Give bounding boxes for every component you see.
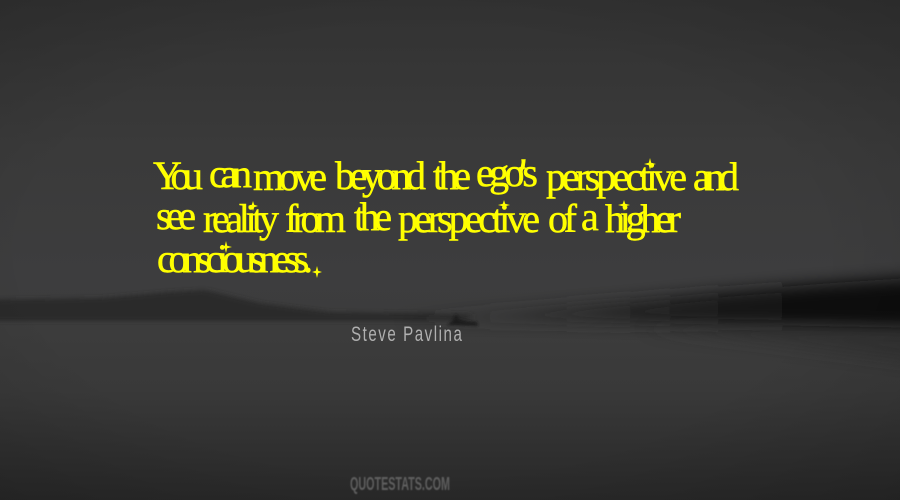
quote text: consciousness. <box>157 236 313 281</box>
distant shoreline left <box>0 290 470 321</box>
quote text: can <box>209 151 252 196</box>
quote text: reality <box>203 196 279 241</box>
quote text: ego's <box>476 150 538 195</box>
water shade right <box>640 328 900 365</box>
quote text: and <box>693 154 739 199</box>
source watermark: QUOTESTATS.COM <box>350 474 450 494</box>
small boat on the horizon <box>447 314 478 326</box>
quote text: the <box>433 153 471 198</box>
author name: Steve Pavlina <box>351 321 463 346</box>
quote text <box>153 150 739 281</box>
quote text: higher <box>605 196 681 241</box>
quote text: beyond <box>335 153 426 198</box>
sparkle accents on the quote <box>220 158 656 278</box>
quote text: perspective <box>398 196 540 241</box>
quote text: from <box>285 196 346 241</box>
quote text: see <box>156 193 196 238</box>
quote text: the <box>354 194 392 239</box>
quote text: a <box>581 194 599 239</box>
distant shoreline right <box>400 276 900 328</box>
quote text: of <box>548 196 578 241</box>
quote text: perspective <box>546 154 687 199</box>
quote text: move <box>253 154 327 199</box>
quote text: You <box>153 153 203 198</box>
